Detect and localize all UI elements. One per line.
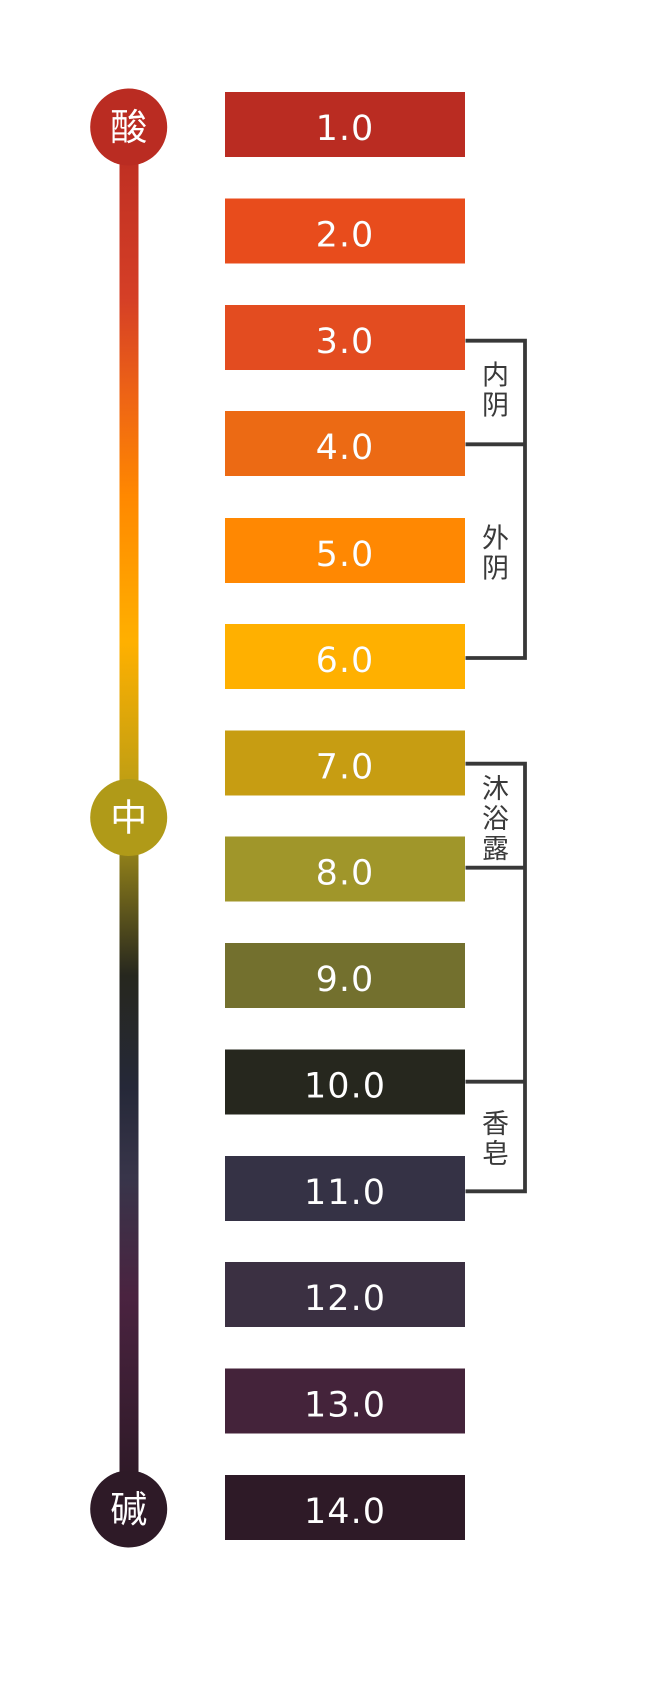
label: soap bbox=[482, 1102, 509, 1171]
bar 3.0: 3.0 bbox=[316, 322, 374, 362]
bar 14.0: 14.0 bbox=[304, 1492, 386, 1532]
bar 10.0: 10.0 bbox=[304, 1066, 386, 1106]
bar 8.0: 8.0 bbox=[316, 854, 374, 894]
bar 1.0 bbox=[225, 92, 465, 157]
label: external: 外 bbox=[482, 516, 509, 556]
bar 7.0: 7.0 bbox=[316, 748, 374, 788]
label: external: 阴 bbox=[482, 546, 509, 586]
bar 12.0: 12.0 bbox=[304, 1279, 386, 1319]
circle: neutral: 中 bbox=[110, 788, 147, 842]
gradient stem bbox=[120, 127, 138, 1509]
bar 4.0 bbox=[225, 411, 465, 476]
bar 1.0: 1.0 bbox=[316, 109, 374, 149]
bar 12.0 bbox=[225, 1262, 465, 1327]
bar 2.0 bbox=[225, 198, 465, 264]
label: body wash: 浴 bbox=[482, 797, 509, 836]
label: body wash: 沐 bbox=[482, 767, 509, 806]
label: body wash: 露 bbox=[482, 827, 509, 866]
label: internal: 阴 bbox=[482, 384, 509, 422]
bar 13.0 bbox=[225, 1368, 465, 1434]
circle: alkali bbox=[90, 1470, 167, 1548]
bar 5.0: 5.0 bbox=[316, 535, 374, 575]
label: body wash bbox=[482, 767, 509, 866]
circle: acid: 酸 bbox=[110, 97, 147, 151]
bar 10.0 bbox=[225, 1050, 465, 1114]
bar 11.0 bbox=[225, 1156, 465, 1221]
bar 5.0 bbox=[225, 518, 465, 583]
bar 9.0 bbox=[225, 943, 465, 1008]
bar 11.0: 11.0 bbox=[304, 1173, 386, 1213]
bar 2.0: 2.0 bbox=[316, 216, 374, 256]
circle: neutral bbox=[90, 779, 167, 856]
bar 3.0 bbox=[225, 305, 465, 370]
circle: acid bbox=[90, 88, 167, 166]
bar 13.0: 13.0 bbox=[304, 1386, 386, 1426]
label: soap: 皂 bbox=[482, 1132, 509, 1171]
bar 8.0 bbox=[225, 836, 465, 902]
label: external bbox=[482, 516, 509, 586]
label: soap: 香 bbox=[482, 1102, 509, 1141]
bar 14.0 bbox=[225, 1475, 465, 1540]
bracket: feminine care bbox=[466, 341, 525, 658]
label: internal: 内 bbox=[482, 354, 509, 392]
bar 7.0 bbox=[225, 730, 465, 796]
bar 6.0: 6.0 bbox=[316, 641, 374, 681]
circle: alkali: 碱 bbox=[110, 1479, 147, 1533]
bracket: body wash and soap bbox=[466, 764, 525, 1191]
label: internal bbox=[482, 354, 509, 422]
bar 9.0: 9.0 bbox=[316, 960, 374, 1000]
bar 6.0 bbox=[225, 624, 465, 689]
bar 4.0: 4.0 bbox=[316, 428, 374, 468]
